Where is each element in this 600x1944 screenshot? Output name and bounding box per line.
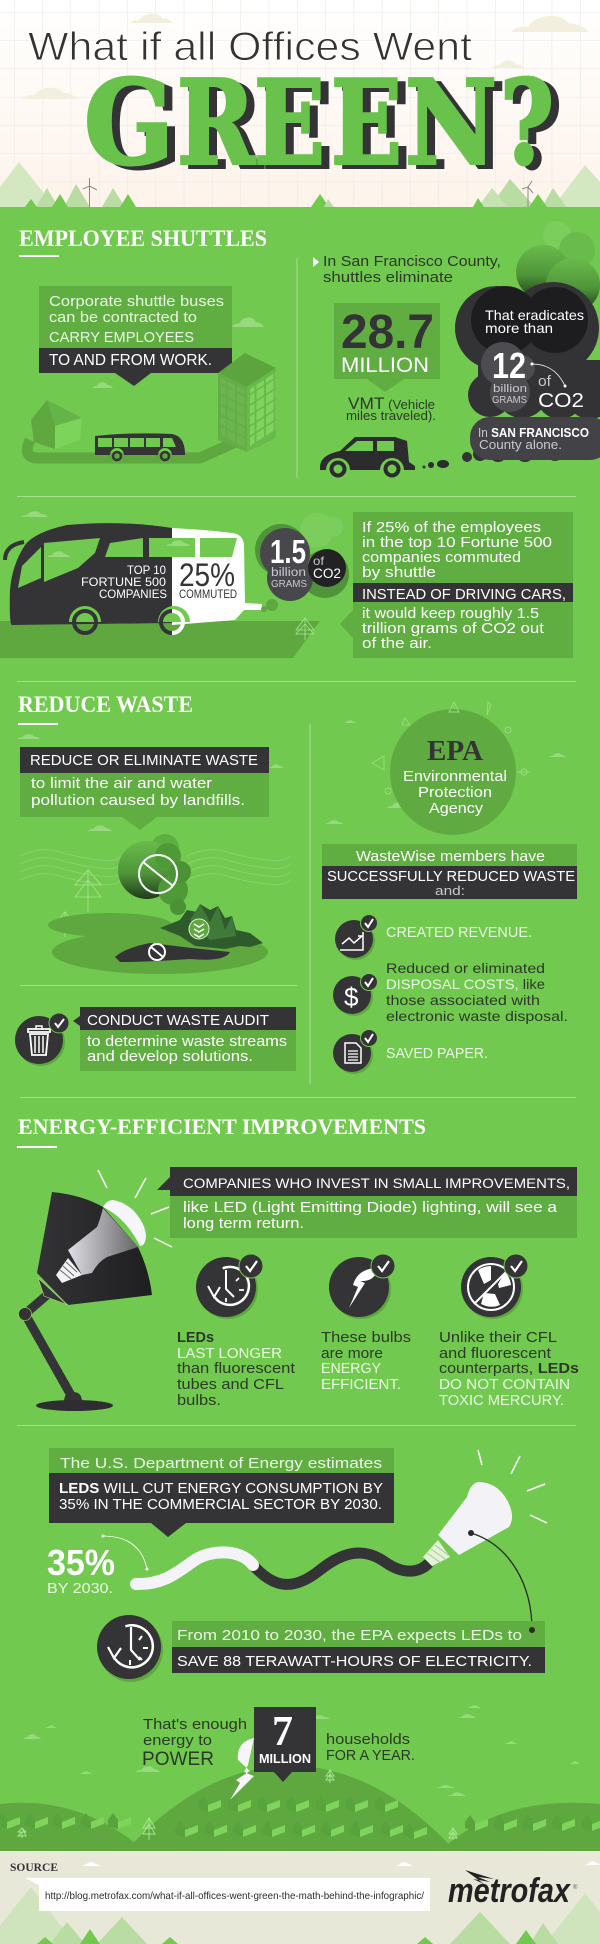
text: LEDs last longer: than fluorescent [177,1361,295,1377]
illustration: commuter bus 25 percent: 25% [179,557,235,593]
illustration: smoke cloud with 12 billion grams: In SAN FRANCISCO [478,426,589,440]
panel: corporate shuttle callout: can be contracted to [49,310,197,326]
text: disposal costs: those associated with [386,992,540,1008]
text: in San Francisco County: shuttles eliminate [323,270,453,286]
stat: 28.7 million VMT [334,303,440,423]
text: energy efficient: are more [321,1346,383,1362]
stat: 28.7 million VMT: 28.7 [341,306,434,359]
panel: WasteWise members: WasteWise members have [356,849,545,865]
panel: companies who invest: like LED (Light Emitting Diode) lighting, will see a [183,1200,558,1216]
metrofax logo: ® [573,1884,578,1891]
panel: 25 percent of employees: it would keep roughly 1.5 [362,606,539,622]
divider [17,681,576,682]
panel: companies who invest: COMPANIES WHO INVEST IN SMALL IMPROVEMENTS, [183,1176,570,1191]
title GREEN?: G [84,56,174,192]
title GREEN?: ? [508,60,562,196]
illustration: commuter bus 25 percent: TOP 10 [127,563,166,577]
EPA circle: Environmental [403,768,507,785]
panel: department of energy estimate: LEDS WILL CUT ENERGY CONSUMPTION BY [59,1481,383,1497]
illustration: small shuttle bus [95,433,185,460]
text: that's enough energy to power: That's enough [143,1716,247,1733]
title GREEN? [84,56,562,196]
text: households for a year [326,1731,415,1764]
divider: shuttles vertical [296,258,298,478]
footer background [0,1851,600,1944]
stat: 35 percent by 2030: BY 2030. [47,1580,113,1597]
text: LEDs last longer: bulbs. [177,1393,221,1409]
text: disposal costs [386,960,568,1024]
panel: 25 percent of employees: by shuttle [362,565,436,581]
icon: saved paper [333,1030,378,1074]
panel: reduce or eliminate waste: pollution caused by landfills. [31,792,245,809]
illustration: exhaust cloud 1.5 billion grams: of [313,554,325,568]
illustration: office building [218,353,276,452]
illustration: smoke cloud with 12 billion grams: 12 [492,345,526,386]
icon: waste audit trash can [15,1013,69,1066]
illustration: commuter bus 25 percent: COMPANIES [99,587,167,601]
title GREEN?: E [331,56,402,192]
small clouds in bottom landscape [23,1705,580,1796]
title GREEN?: N [413,60,505,196]
header mountains and wind turbines [0,162,600,207]
illustration: desk lamp with LED bulb [18,1170,172,1411]
text: LEDs last longer: tubes and CFL [177,1377,284,1393]
text: no toxic mercury [439,1330,579,1409]
panel: corporate shuttle callout [39,286,232,386]
panel: department of energy estimate: The U.S. Department of Energy estimates [60,1456,382,1472]
text: that's enough energy to power: energy to [143,1732,212,1749]
text: created revenue: CREATED REVENUE. [386,925,532,941]
source label: SOURCE [10,1860,58,1874]
stat: 35 percent by 2030: 35% [47,1542,115,1583]
EPA circle: EPA [427,736,484,767]
text: no toxic mercury: counterparts, LEDs [439,1361,579,1377]
panel: companies who invest: long term return. [183,1216,304,1232]
text: energy efficient [321,1330,411,1393]
text: LEDs last longer [177,1330,295,1409]
illustration: exhaust cloud 1.5 billion grams: 1.5 [270,533,306,570]
panel: corporate shuttle callout: TO AND FROM WORK. [49,352,212,369]
icon: disposal cost dollar: $ [344,982,359,1012]
title GREEN?: ? [500,56,554,192]
divider: left column [20,985,297,986]
stat: 7 million: MILLION [259,1751,311,1766]
panel: 25 percent of employees: companies commuted [362,550,521,566]
panel: department of energy estimate: 35% IN THE COMMERCIAL SECTOR BY 2030. [59,1497,382,1513]
illustration: commuter bus 25 percent: FORTUNE 500 [81,575,166,589]
illustration: landfill with smoke and trees [20,834,290,974]
text: disposal costs: DISPOSAL COSTS, like [386,976,545,992]
panel: reduce or eliminate waste: REDUCE OR ELIMINATE WASTE [30,752,258,769]
illustration: exhaust cloud 1.5 billion grams: billion [271,567,306,579]
title GREEN?: R [177,56,256,192]
icon: leaf bolt energy efficient [329,1254,395,1319]
stat: 7 million [254,1707,316,1782]
heading: energy-efficient improvements: ENERGY-EFFICIENT IMPROVEMENTS [18,1114,426,1139]
panel: 25 percent of employees: INSTEAD OF DRIVING CARS, [362,587,566,603]
illustration: ground under bus [0,618,320,658]
stat: 35 percent by 2030 [47,1534,148,1597]
text: energy efficient: ENERGY [321,1361,381,1377]
panel: EPA expects LEDs to save: From 2010 to 2030, the EPA expects LEDs to [177,1628,522,1644]
text: in San Francisco County [313,254,501,286]
icon: no toxic mercury [461,1254,528,1319]
text: households for a year: FOR A YEAR. [326,1747,415,1764]
title GREEN?: E [254,56,325,192]
illustration: car with exhaust [320,437,449,476]
panel: 25 percent of employees [340,512,573,658]
text: no toxic mercury: TOXIC MERCURY. [439,1393,564,1409]
divider: waste vertical [310,724,311,1084]
panel: companies who invest [157,1167,577,1238]
illustration: power cable and bulb [136,1450,547,1633]
metrofax logo: metrofax [448,1872,572,1910]
text: that's enough energy to power: POWER [142,1749,214,1770]
icon: clock [97,1615,163,1682]
panel: conduct waste audit [73,1007,296,1071]
title GREEN?: N [405,56,497,192]
small clouds in waste section [17,720,566,831]
illustration: smoke cloud with 12 billion grams: CO2 [538,390,584,412]
text: LEDs last longer: LAST LONGER [177,1346,282,1362]
icon: clock last longer [196,1254,263,1319]
text: that's enough energy to power [142,1716,247,1770]
panel: conduct waste audit: CONDUCT WASTE AUDIT [87,1013,269,1029]
illustration: smoke cloud with 12 billion grams [455,221,600,462]
text: disposal costs: electronic waste disposal. [386,1008,568,1024]
EPA circle: Agency [429,800,484,817]
panel: corporate shuttle callout: Corporate shuttle buses [49,294,224,310]
text: no toxic mercury: DO NOT CONTAIN [439,1377,570,1393]
stat: 28.7 million VMT: VMT (Vehicle [348,394,435,413]
text: no toxic mercury: Unlike their CFL [439,1330,557,1346]
panel: WasteWise members [322,844,577,899]
text: energy efficient: These bulbs [321,1330,411,1346]
header background [0,0,600,207]
stat: 7 million: 7 [272,1709,293,1755]
illustration: exhaust cloud 1.5 billion grams [255,513,349,612]
illustration: road between house and office [27,440,240,458]
footer mountains [0,1887,600,1944]
icon: disposal cost dollar [333,974,378,1016]
panel: reduce or eliminate waste: to limit the air and water [31,775,212,792]
divider [17,1425,576,1426]
panel: WasteWise members: SUCCESSFULLY REDUCED WASTE [327,868,575,885]
panel: conduct waste audit: and develop solutions. [87,1049,253,1065]
panel: EPA expects LEDs to save [172,1621,545,1673]
panel: department of energy estimate [49,1448,394,1537]
header clouds [22,14,589,99]
text: disposal costs: Reduced or eliminated [386,960,545,976]
title GREEN?: E [262,60,333,196]
small cloud above bus [21,511,48,517]
illustration: exhaust cloud 1.5 billion grams: GRAMS [271,578,307,590]
icon: created revenue [335,914,378,960]
illustration: exhaust cloud 1.5 billion grams: CO2 [313,566,341,581]
footer clouds [82,1861,600,1866]
text: households for a year: households [326,1731,410,1748]
illustration: smoke cloud with 12 billion grams: GRAMS [492,395,527,406]
source link box [25,1878,430,1911]
text: no toxic mercury: and fluorescent [439,1346,551,1362]
divider [17,496,576,497]
EPA circle [372,702,530,835]
panel: EPA expects LEDs to save: SAVE 88 TERAWATT-HOURS OF ELECTRICITY. [177,1654,532,1670]
title GREEN?: E [339,60,410,196]
illustration: smoke cloud with 12 billion grams: of [538,373,552,390]
icon: lightning bolt [230,1738,254,1800]
text: energy efficient: EFFICIENT. [321,1377,401,1393]
heading: employee shuttles: EMPLOYEE SHUTTLES [19,226,267,251]
illustration: smoke cloud with 12 billion grams: billion [493,383,527,395]
title GREEN?: R [185,60,264,196]
panel: corporate shuttle callout: CARRY EMPLOYEES [49,330,194,346]
heading: reduce waste: REDUCE WASTE [18,692,193,717]
illustration: smoke cloud with 12 billion grams: That eradicates [485,307,584,323]
title GREEN?: G [92,60,182,196]
title line: What if all Offices Went [28,25,472,69]
illustration: house [31,400,82,449]
text: LEDs last longer: LEDs [177,1330,214,1346]
illustration: commuter bus 25 percent [5,523,262,633]
illustration: smoke cloud with 12 billion grams: more than [485,320,553,336]
text: in San Francisco County: In San Francisco County, [323,254,501,270]
panel: conduct waste audit: to determine waste streams [87,1034,287,1050]
panel: reduce or eliminate waste [20,747,269,830]
source link box: http://blog.metrofax.com/what-if-all-offices-went-green-the-math-behind-the-infographic/ [45,1890,424,1902]
panel: 25 percent of employees: in the top 10 Fortune 500 [362,535,552,551]
small clouds in shuttle panel [92,318,264,388]
illustration: smoke cloud with 12 billion grams: County alone. [479,438,562,452]
text: saved paper: SAVED PAPER. [386,1046,488,1062]
panel: 25 percent of employees: of the air. [362,636,432,652]
divider [20,1097,576,1098]
panel: 25 percent of employees: If 25% of the employees [362,520,541,536]
EPA circle: Protection [418,784,492,801]
panel: WasteWise members: and: [435,883,465,898]
panel: 25 percent of employees: trillion grams of CO2 out [362,621,544,637]
illustration: hills with houses [0,1765,600,1851]
illustration: commuter bus 25 percent: COMMUTED [179,589,237,601]
stat: 28.7 million VMT: MILLION [341,354,429,377]
stat: 28.7 million VMT: miles traveled). [346,408,436,423]
